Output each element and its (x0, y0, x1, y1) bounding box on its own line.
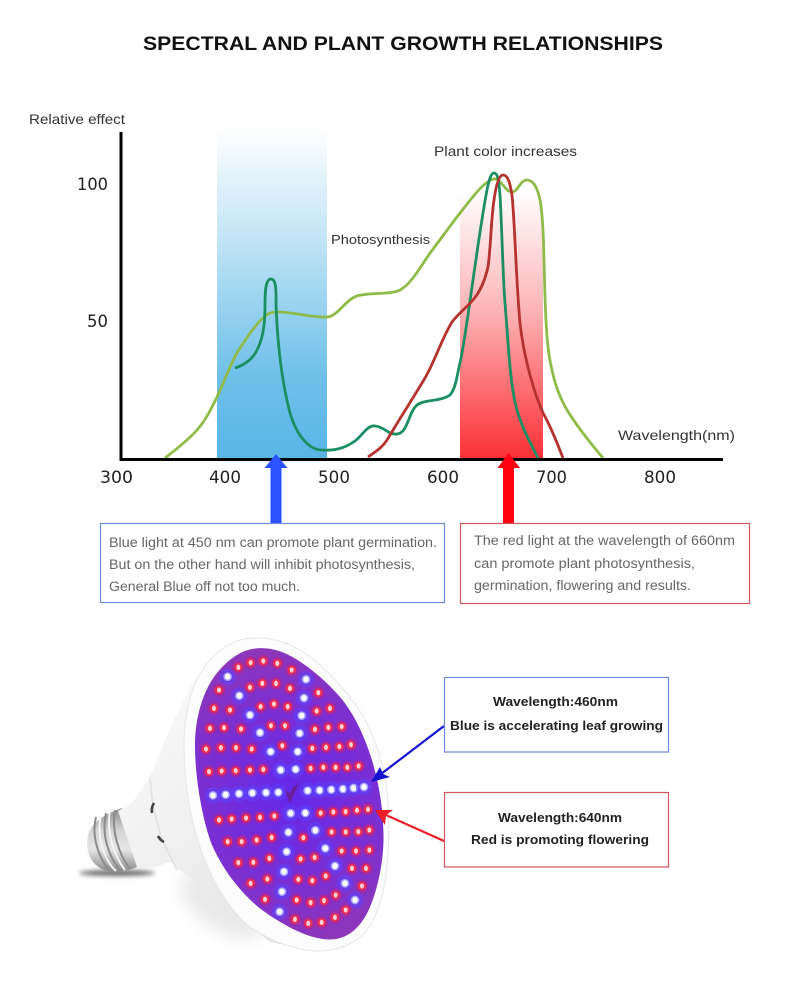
callout: blue wavelength: Blue is accelerating leaf growing (450, 719, 663, 733)
illustration: LED grow bulb (79, 638, 389, 952)
x axis tick labels: 800 (644, 468, 676, 488)
chlorophyll curve (235, 173, 538, 458)
red LEDs (199, 654, 376, 930)
soft shadow (169, 858, 275, 952)
callout: blue wavelength: Wavelength:460nm (493, 695, 618, 709)
callout: blue light: General Blue off not too much. (109, 579, 300, 594)
center logo (284, 784, 299, 803)
callout: red wavelength: Wavelength:640nm (498, 811, 622, 825)
y axis tick labels (77, 175, 108, 332)
x axis tick labels: 400 (209, 468, 241, 488)
x axis title: Wavelength(nm) (618, 427, 735, 443)
y axis title: Relative effect (29, 111, 125, 127)
vent slots (152, 803, 164, 842)
callout: red light (460, 524, 750, 604)
callout: blue light (100, 524, 444, 602)
arrow: blue up (264, 454, 288, 524)
red wavelength band (460, 190, 543, 458)
callout: blue light: Blue light at 450 nm can promote plant germination. (109, 535, 437, 550)
callout: red light: The red light at the wavelength of 660nm (474, 533, 735, 548)
floor shadow (79, 870, 155, 876)
label: photosynthesis: Photosynthesis (331, 232, 431, 247)
red pigment curve (368, 175, 563, 458)
body seam (150, 777, 177, 870)
x axis tick labels: 700 (536, 468, 567, 488)
rim (184, 638, 389, 951)
arrow: red pointer (375, 810, 444, 841)
callout: blue wavelength (444, 678, 668, 752)
callout: red light: germination, flowering and results. (474, 578, 691, 593)
LED disc (195, 648, 384, 940)
title: SPECTRAL AND PLANT GROWTH RELATIONSHIPS (143, 34, 663, 55)
bulb body (118, 678, 310, 950)
blue LEDs (205, 668, 372, 920)
label: plant color increases: Plant color increases (434, 143, 577, 159)
screw base (87, 808, 137, 872)
axes (121, 132, 723, 460)
x axis tick labels: 600 (427, 468, 459, 488)
y axis tick labels: 100 (77, 175, 108, 195)
x axis tick labels: 500 (318, 468, 350, 488)
arrow: red up (498, 453, 520, 524)
LED array (199, 654, 376, 930)
blue wavelength band (217, 128, 327, 458)
callout: red light: can promote plant photosynthesis, (474, 556, 695, 571)
callout: blue light: But on the other hand will inhibit photosynthesis, (109, 557, 415, 572)
x axis tick labels (100, 468, 676, 488)
arrow: blue pointer (371, 726, 444, 782)
photosynthesis curve (165, 179, 603, 458)
callout: red wavelength (444, 792, 668, 867)
chart: spectral response (29, 111, 735, 488)
x axis tick labels: 300 (100, 468, 133, 488)
callout: red wavelength: Red is promoting flowering (471, 833, 649, 847)
y axis tick labels: 50 (87, 312, 108, 332)
